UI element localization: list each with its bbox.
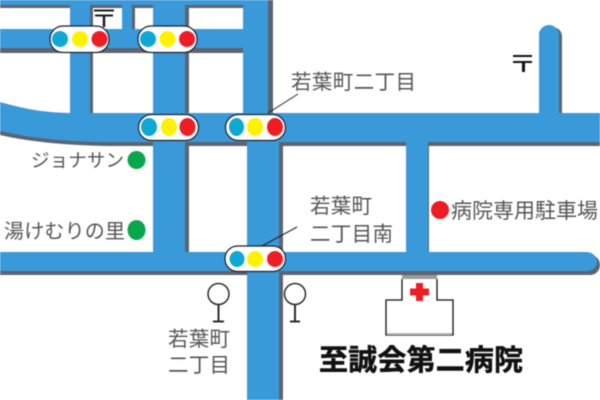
label: 若葉町二丁目南: 若葉町	[310, 195, 372, 218]
label: 若葉町二丁目 bus stop: 二丁目	[168, 354, 230, 377]
traffic signal: top left	[50, 26, 109, 52]
label: 病院専用駐車場: 病院専用駐車場	[451, 200, 598, 223]
traffic signal: 若葉町二丁目南	[225, 246, 286, 272]
label: 若葉町二丁目南	[310, 195, 393, 246]
bus stop: right	[284, 284, 306, 322]
post office symbol: upper left	[94, 10, 114, 27]
label: ジョナサン: ジョナサン	[31, 150, 124, 171]
label: 若葉町二丁目: 若葉町二丁目	[291, 71, 416, 94]
title: 至誠会第二病院: 至誠会第二病院	[319, 344, 523, 377]
leader line: 若葉町二丁目	[268, 94, 298, 113]
marker: ジョナサン	[128, 151, 146, 169]
leader line: 若葉町二丁目南	[262, 227, 297, 246]
traffic signal: main road left	[138, 114, 198, 140]
bus stop: left	[208, 284, 229, 322]
marker: 病院専用駐車場	[431, 201, 449, 219]
post office symbol: upper right	[513, 56, 532, 72]
hospital building icon	[386, 275, 453, 335]
icon: red cross	[410, 283, 429, 301]
label: 若葉町二丁目南: 二丁目南	[310, 223, 393, 246]
traffic signal: 若葉町二丁目	[226, 114, 286, 140]
label: 若葉町二丁目 bus stop	[168, 328, 230, 377]
traffic signal: top middle	[138, 26, 197, 52]
marker: 湯けむりの里	[128, 220, 146, 240]
label: 若葉町二丁目 bus stop: 若葉町	[168, 328, 230, 351]
label: 湯けむりの里: 湯けむりの里	[4, 220, 125, 243]
